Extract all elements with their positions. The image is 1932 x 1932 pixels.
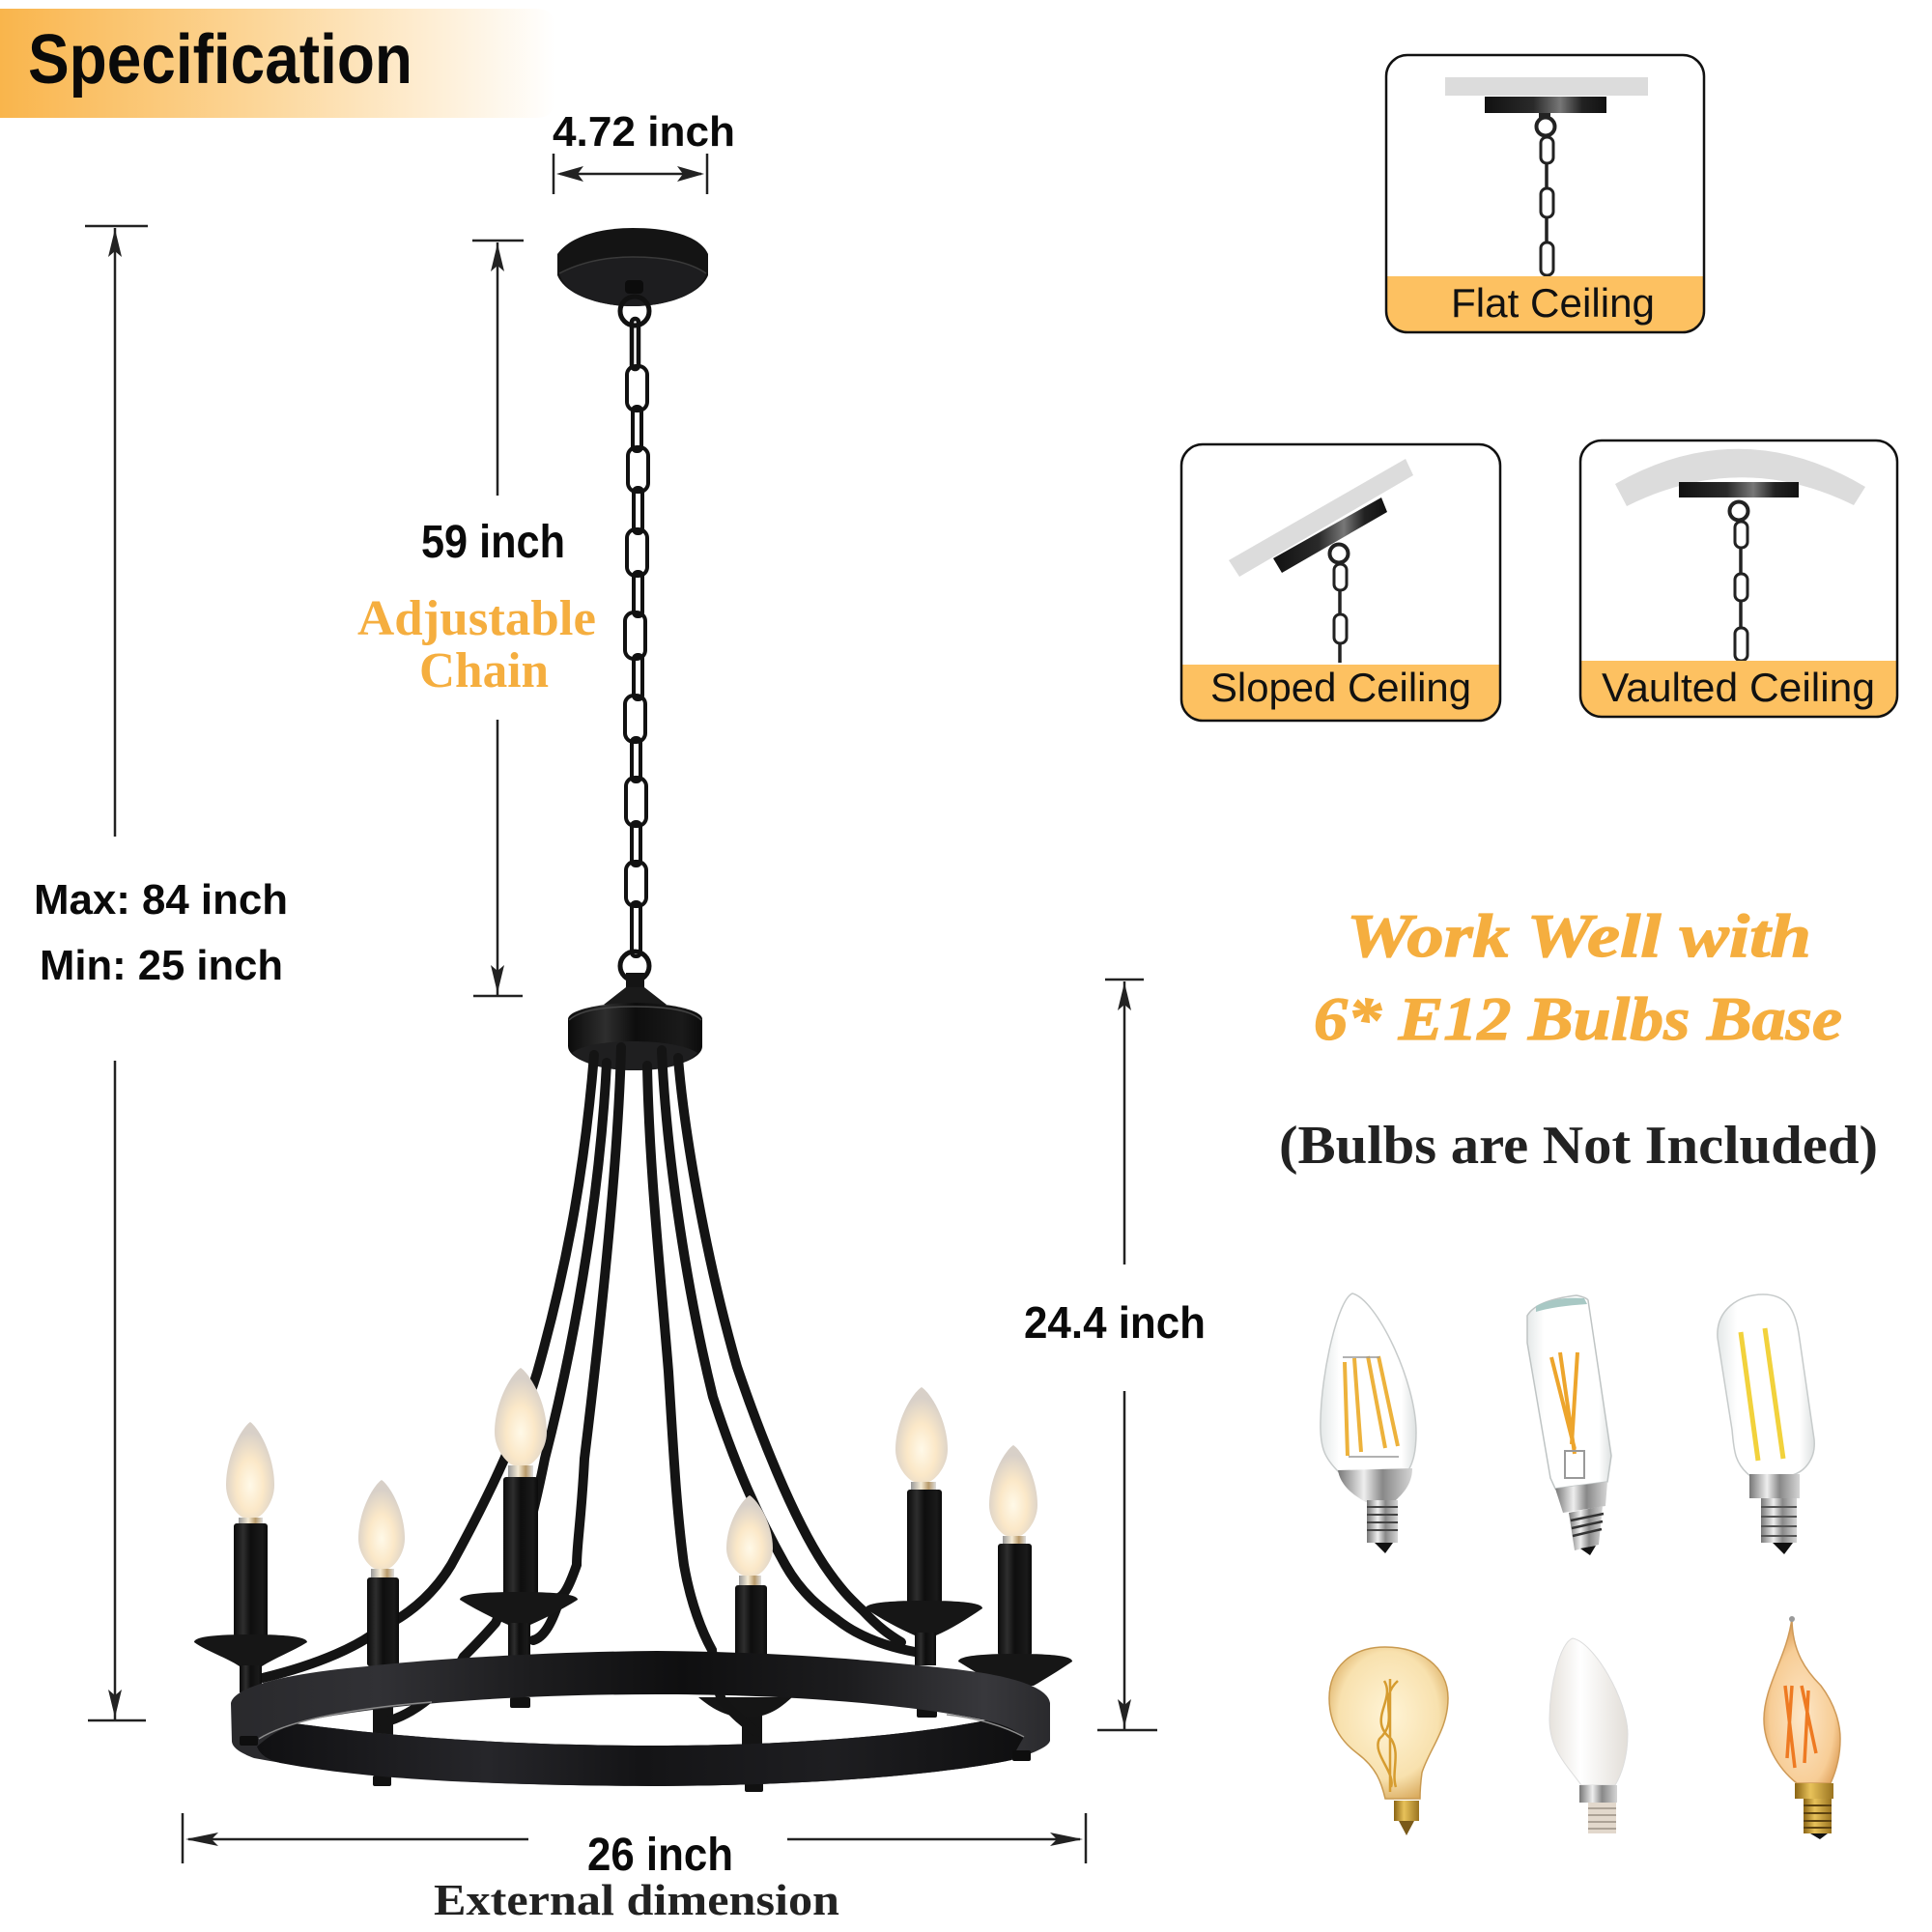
curved arms (263, 1047, 915, 1732)
dimension: external width 26 inch: 26 inch (587, 1830, 733, 1881)
panel: sloped ceiling: Sloped Ceiling (1210, 665, 1471, 710)
hanging chain (620, 297, 649, 980)
heading: work well with E12 bulbs: 6* E12 Bulbs Base (1314, 984, 1842, 1053)
ring feet (240, 1736, 1031, 1761)
dimension: chain length 59 inch adjustable: Adjustable (357, 591, 596, 646)
bulb: clear candle filament (1321, 1293, 1416, 1553)
bulb: amber globe (1329, 1647, 1448, 1835)
dimension: canopy width 4.72 inch: 4.72 inch (553, 108, 735, 156)
central hub (568, 973, 702, 1070)
dimension: external width 26 inch (183, 1813, 1086, 1924)
candle 3 (460, 1368, 578, 1656)
candle 5 (866, 1387, 982, 1665)
candle 1 (194, 1422, 307, 1692)
heading: work well with E12 bulbs (1314, 901, 1842, 1053)
heading banner: Specification: Specification (28, 21, 412, 99)
panel: sloped ceiling (1181, 444, 1500, 721)
dimension: chain length 59 inch adjustable: 59 inch (421, 517, 565, 568)
panel: flat ceiling: Flat Ceiling (1451, 280, 1655, 326)
candles with bulbs (194, 1368, 1072, 1692)
dimension: body height 24.4 inch: 24.4 inch (1024, 1297, 1206, 1348)
dimension: chain length 59 inch adjustable (357, 241, 596, 996)
bulb: amber flame tip (1764, 1616, 1840, 1839)
bulb: frosted white candle (1549, 1638, 1628, 1833)
candle 6 (958, 1445, 1072, 1686)
dimension: overall height max 84 min 25 inch: Max: 84 inch (34, 876, 288, 923)
candle 4 (726, 1495, 773, 1658)
wagon wheel ring (231, 1651, 1050, 1786)
dimension: chain length 59 inch adjustable: Chain (419, 643, 549, 698)
panel: vaulted ceiling (1580, 440, 1897, 717)
dimension: body height 24.4 inch (1024, 980, 1206, 1730)
chandelier photo (194, 228, 1072, 1792)
heading banner: Specification (0, 9, 555, 118)
panel: flat ceiling (1386, 55, 1704, 332)
dimension: overall height max 84 min 25 inch: Min: 25 inch (40, 942, 283, 989)
candle arm stems and cup behind ring (373, 1642, 937, 1792)
dimension: external width 26 inch: External dimension (434, 1875, 839, 1924)
heading: work well with E12 bulbs: Work Well with (1347, 901, 1811, 970)
panel: vaulted ceiling: Vaulted Ceiling (1602, 665, 1875, 710)
bulb: clear T-shape tubular (1718, 1294, 1814, 1554)
candle 2 (358, 1480, 405, 1666)
note: bulbs not included: (Bulbs are Not Included) (1279, 1116, 1878, 1176)
ceiling canopy (557, 228, 708, 306)
bulb: clear tube (1527, 1295, 1611, 1555)
dimension: canopy width 4.72 inch (553, 108, 735, 194)
dimension: overall height max 84 min 25 inch (34, 226, 288, 1720)
